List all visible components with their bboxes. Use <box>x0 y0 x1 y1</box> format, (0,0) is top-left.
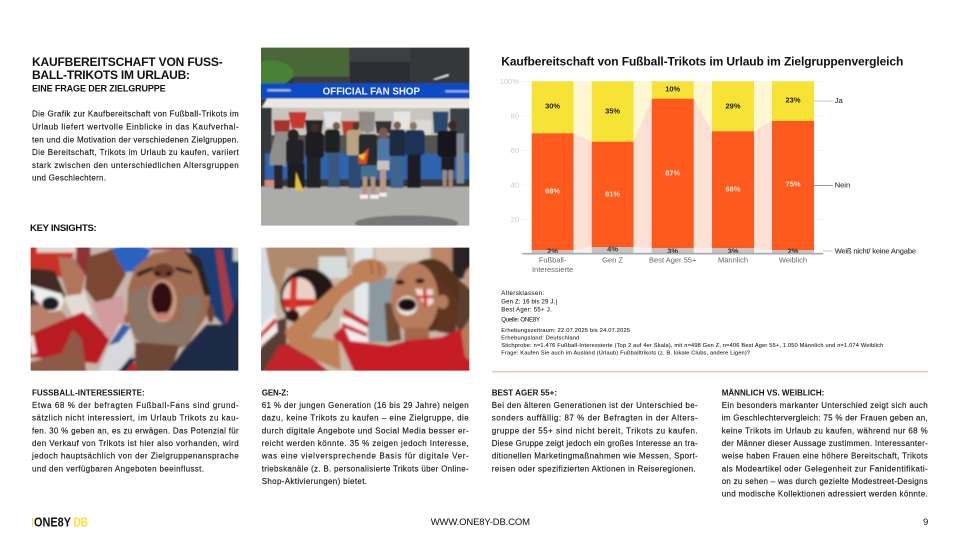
insight: Gen-Z: 61 % der jungen Generation (16 bis 29 Jahre) neigen <box>262 401 469 410</box>
insight: Männlich vs. Weiblich: keine Trikots im Urlaub zu kaufen, während nur 68 % <box>722 426 928 435</box>
sunglasses <box>23 283 64 312</box>
insight: Fußball-Interessierte: fen. 30 % geben an, es zu erwägen. Das Potenzial für <box>32 426 239 435</box>
head <box>127 249 210 351</box>
insight: Gen-Z: was eine vielversprechende Basis für digitale Ver- <box>261 452 469 461</box>
legend <box>814 96 916 256</box>
title: BALL-TRIKOTS IM URLAUB: <box>32 68 190 82</box>
x axis labels: Weiblich <box>779 256 807 265</box>
survey methodology note: Frage: Kaufen Sie auch im Ausland (Urlaub) Fußballtrikots (z. B. lokale Clubs, andere Ligen)? <box>501 350 750 356</box>
neck and jacket <box>135 342 180 375</box>
footer url: WWW.ONE8Y-DB.COM <box>431 517 530 528</box>
insight: Fußball-Interessierte: den Verkauf von Trikots ist hier also vorhanden, wird <box>32 439 239 448</box>
survey methodology note: Stichprobe: n=1.476 Fußball-Interessierte (Top 2 auf 4er Skala), mit n=498 Gen Z, n=406 Best Ager 55+, 1.050 Männlich und n=1.074 Weiblich <box>501 343 883 349</box>
bar: Gen Z: 4% <box>607 245 618 254</box>
footer logo: DB <box>74 516 88 530</box>
sign text: OFFICIAL FAN SHOP <box>323 86 420 97</box>
y axis labels <box>500 77 519 224</box>
chart title: Kaufbereitschaft von Fußball-Trikots im Urlaub im Zielgruppenvergleich <box>501 54 903 68</box>
title: KAUFBEREITSCHAFT VON FUSS- <box>32 55 223 69</box>
y axis labels: 40 <box>511 180 519 190</box>
bar: Weiblich: 23% <box>785 95 801 104</box>
bar: Männlich: 3% <box>728 247 739 256</box>
photo: official fan shop <box>261 48 470 226</box>
y axis labels: 100% <box>500 77 519 86</box>
insight: Fußball-Interessierte: jedoch hauptsächlich von der Zielgruppenansprache <box>31 452 239 461</box>
intro text block: Die Grafik zur Kaufbereitschaft von Fußball-Trikots im <box>32 110 239 119</box>
intro text block: Urlaub liefert wertvolle Einblicke in das Kaufverhal- <box>32 122 239 132</box>
footer logo: ONE8Y <box>34 516 72 530</box>
bar: Männlich: 68% <box>725 185 741 194</box>
insight: Männlich vs. Weiblich: Ein besonders markanter Unterschied zeigt sich auch <box>722 401 928 410</box>
insight: Fußball-Interessierte: sätzlich nicht interessiert, im Urlaub Trikots zu kau- <box>32 414 239 423</box>
age classes note: Best Ager: 55+ J. <box>501 307 552 313</box>
x axis labels <box>532 256 807 274</box>
insight: Gen-Z: reicht werden könnte. 35 % zeigen jedoch Interesse, <box>262 439 469 448</box>
insight: Best Ager 55+: reisen oder spezifizierten Aktionen in Reiseregionen. <box>492 464 696 473</box>
insight: Best Ager 55+: Bei den älteren Generationen ist der Unterschied be- <box>492 401 698 410</box>
insight: Männlich vs. Weiblich: im Geschlechtervergleich: 75 % der Frauen geben an, <box>722 414 928 423</box>
insight: Gen-Z: dazu, keine Trikots zu kaufen – eine Zielgruppe, die <box>262 414 469 423</box>
y axis labels: 80 <box>511 112 519 120</box>
insight: Fußball-Interessierte: und den verfügbaren Angeboten beeinflusst. <box>32 464 204 473</box>
bar: Weiblich: 75% <box>785 180 801 189</box>
insight: Gen-Z: durch digitale Angebote und Social Media besser er- <box>262 426 469 435</box>
survey methodology note <box>501 328 883 356</box>
insight: Männlich vs. Weiblich: als Modeartikel oder Gelegenheit zur Fanidentifikati- <box>722 464 928 473</box>
bar: Best Ager 55+ <box>652 81 694 256</box>
x axis labels: Männlich <box>718 256 748 265</box>
x axis labels: Best Ager 55+ <box>649 256 697 265</box>
connector bands between bars <box>574 81 772 253</box>
chart notes <box>501 291 883 356</box>
y axis labels: 60 <box>511 146 519 155</box>
woman behind <box>280 268 336 327</box>
bar: Fußball-Interessierte: 30% <box>545 102 560 111</box>
insight: Männlich vs. Weiblich: der Männer dieser Aussage zustimmen. Interessanter- <box>722 439 928 448</box>
people <box>269 132 288 167</box>
raised arm <box>285 274 365 370</box>
bar: Fußball-Interessierte: 68% <box>545 186 560 195</box>
insight: Fußball-Interessierte: FUSSBALL-INTERESSIERTE: <box>32 388 145 397</box>
bar: Gen Z <box>592 81 634 254</box>
bar: Gen Z: 35% <box>605 106 620 115</box>
shirt <box>340 327 470 371</box>
survey methodology note: Erhebungsland: Deutschland <box>501 335 579 341</box>
photo: cheering female fans in red <box>261 248 470 371</box>
x axis labels: Fußball- <box>539 256 567 265</box>
legend: Weiß nicht/ keine Angabe <box>835 247 916 256</box>
insight: Fußball-Interessierte: Etwa 68 % der befragten Fußball-Fans sind grund- <box>32 401 239 410</box>
insight: Männlich vs. Weiblich <box>721 388 928 499</box>
bar: Gen Z: 61% <box>605 189 620 198</box>
intro text block <box>32 110 239 183</box>
insight: Männlich vs. Weiblich: on zu sehen – was durch gezielte Modestreet-Designs <box>722 477 928 486</box>
insight: Best Ager 55+: gruppe der 55+ sind nicht bereit, Trikots zu kaufen. <box>492 426 698 435</box>
bar: Männlich: 29% <box>725 101 741 110</box>
age classes note: Altersklassen: <box>501 291 544 297</box>
legend: Nein <box>835 180 850 190</box>
page number: 9 <box>923 517 928 528</box>
insight: Best Ager 55+: ditionellen Marketingmaßnahmen wie Messen, Sport- <box>492 452 698 461</box>
heading: key insights: KEY INSIGHTS: <box>30 223 97 234</box>
intro text block: Die Bereitschaft, Trikots im Urlaub zu kaufen, variiert <box>32 148 239 157</box>
face <box>391 263 438 334</box>
subtitle: EINE FRAGE DER ZIELGRUPPE <box>32 83 166 93</box>
legend: Ja <box>835 96 843 105</box>
intro text block: und Geschlechtern. <box>32 174 106 183</box>
source note: Quelle: ONE8Y <box>501 318 540 324</box>
insight: Gen-Z <box>261 388 469 486</box>
insight: Männlich vs. Weiblich: und modische Kollektionen adressiert werden könnte. <box>722 490 928 499</box>
survey methodology note: Erhebungszeitraum: 22.07.2025 bis 24.07.2025 <box>501 328 630 334</box>
title <box>32 55 223 82</box>
bar: Fußball-Interessierte: 2% <box>547 247 558 256</box>
insight: Männlich vs. Weiblich: weise haben Frauen eine höhere Bereitschaft, Trikots <box>721 452 928 461</box>
insight: Best Ager 55+: BEST AGER 55+: <box>492 388 557 397</box>
main woman hair <box>416 257 458 333</box>
y axis labels: 20 <box>511 215 519 224</box>
intro text block: stark zwischen den unterschiedlichen Altersgruppen <box>32 161 239 170</box>
x axis labels: Interessierte <box>532 265 573 274</box>
bar: Best Ager 55+: 87% <box>665 168 681 177</box>
age classes note <box>501 291 557 313</box>
insight: Gen-Z: Shop-Aktivierungen) bietet. <box>262 477 367 486</box>
insight: Best Ager 55+: Diese Gruppe zeigt jedoch ein großes Interesse an tra- <box>492 439 698 448</box>
bar: Männlich <box>712 81 754 256</box>
bar: Weiblich <box>772 81 814 256</box>
insight: Best Ager 55+ <box>492 388 698 473</box>
bar: Best Ager 55+: 3% <box>667 247 678 256</box>
insight: Fußball-Interessierte <box>31 388 239 473</box>
insight: Gen-Z: GEN-Z: <box>262 388 289 397</box>
chart: purchase readiness by target group <box>500 54 916 274</box>
bar: Best Ager 55+: 10% <box>665 85 681 94</box>
intro text block: ten und die Motivation der verschiedenen Zielgruppen. <box>32 135 239 144</box>
insight: Best Ager 55+: sonders auffällig: 87 % der Befragten in der Alters- <box>492 414 698 423</box>
insight: Gen-Z: triebskanäle (z. B. personalisierte Trikots über Online- <box>262 464 469 473</box>
bar: Fußball-Interessierte <box>532 81 574 256</box>
x axis labels: Gen Z <box>602 256 623 265</box>
bar: Weiblich: 2% <box>788 247 799 256</box>
age classes note: Gen Z: 16 bis 29 J.| <box>501 299 557 305</box>
insight: Männlich vs. Weiblich: MÄNNLICH VS. WEIBLICH: <box>722 388 824 397</box>
panel: intro <box>32 55 239 183</box>
photo: screaming football fan <box>30 248 238 371</box>
